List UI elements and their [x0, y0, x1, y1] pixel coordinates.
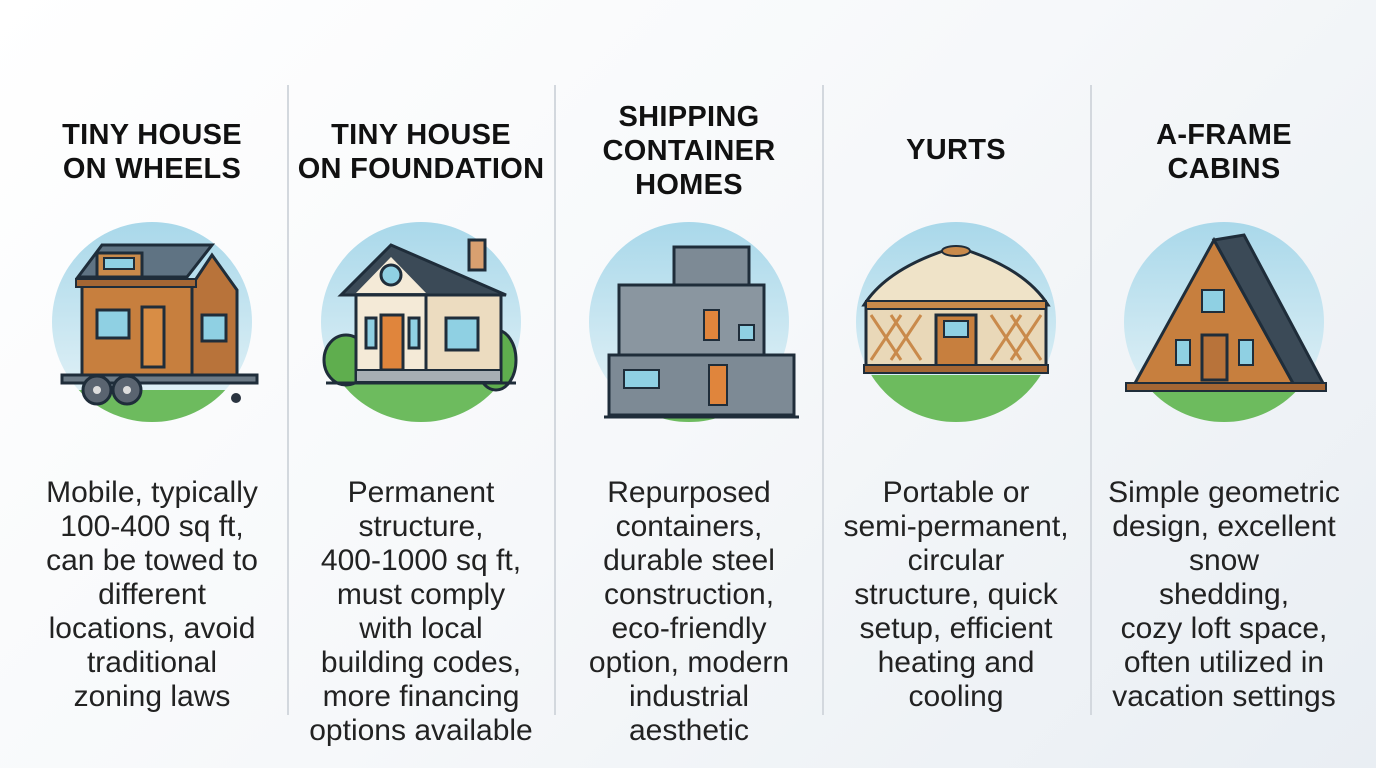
description: must comply	[337, 578, 505, 611]
description	[1108, 476, 1340, 713]
description: circular	[908, 544, 1004, 577]
icon: tiny house on wheels	[52, 222, 258, 422]
icon: yurt	[856, 222, 1056, 422]
title: SHIPPING	[618, 101, 760, 133]
title: ON FOUNDATION	[298, 153, 544, 185]
title: TINY HOUSE	[62, 119, 242, 151]
description: structure,	[358, 510, 484, 543]
column: a-frame cabins	[1108, 119, 1340, 713]
icon: stacked containers	[589, 222, 799, 422]
title: ON WHEELS	[63, 153, 241, 185]
column: tiny house on wheels	[46, 119, 258, 713]
description	[589, 476, 789, 747]
description: snow	[1189, 544, 1259, 577]
description: cooling	[908, 680, 1004, 713]
column: yurts	[843, 134, 1069, 713]
description: Simple geometric	[1108, 476, 1340, 509]
description	[309, 476, 533, 747]
title	[298, 119, 544, 185]
description	[843, 476, 1069, 713]
description: different	[98, 578, 206, 611]
description: containers,	[616, 510, 762, 543]
description: shedding,	[1159, 578, 1289, 611]
description: building codes,	[321, 646, 521, 679]
description: 400-1000 sq ft,	[321, 544, 521, 577]
description: with local	[359, 612, 483, 645]
description: locations, avoid	[49, 612, 255, 645]
description: Portable or	[883, 476, 1029, 509]
description: traditional	[87, 646, 217, 679]
title: A-FRAME	[1156, 119, 1292, 151]
description: option, modern	[589, 646, 789, 679]
description	[46, 476, 258, 713]
title: HOMES	[635, 169, 743, 201]
description: more financing	[323, 680, 519, 713]
column: tiny house on foundation	[298, 119, 544, 747]
title: TINY HOUSE	[331, 119, 511, 151]
title: YURTS	[906, 134, 1006, 166]
description: cozy loft space,	[1121, 612, 1327, 645]
column: shipping container homes	[589, 101, 799, 747]
description: 100-400 sq ft,	[60, 510, 244, 543]
title: CABINS	[1168, 153, 1280, 185]
description: durable steel	[603, 544, 775, 577]
description: industrial	[629, 680, 749, 713]
description: structure, quick	[854, 578, 1058, 611]
description: can be towed to	[46, 544, 258, 577]
title	[603, 101, 775, 201]
icon: a-frame cabin	[1124, 222, 1327, 422]
description: semi-permanent,	[843, 510, 1069, 543]
icon: house on foundation	[321, 222, 521, 422]
description: setup, efficient	[860, 612, 1052, 645]
description: zoning laws	[74, 680, 230, 713]
description: construction,	[604, 578, 774, 611]
description: options available	[309, 714, 533, 747]
title: CONTAINER	[603, 135, 775, 167]
description: aesthetic	[629, 714, 749, 747]
description: Mobile, typically	[46, 476, 258, 509]
description: Permanent	[348, 476, 494, 509]
title	[62, 119, 242, 185]
description: often utilized in	[1124, 646, 1324, 679]
title	[1156, 119, 1292, 185]
description: heating and	[878, 646, 1034, 679]
description: eco-friendly	[611, 612, 767, 645]
description: design, excellent	[1112, 510, 1336, 543]
description: Repurposed	[607, 476, 771, 509]
description: vacation settings	[1112, 680, 1336, 713]
